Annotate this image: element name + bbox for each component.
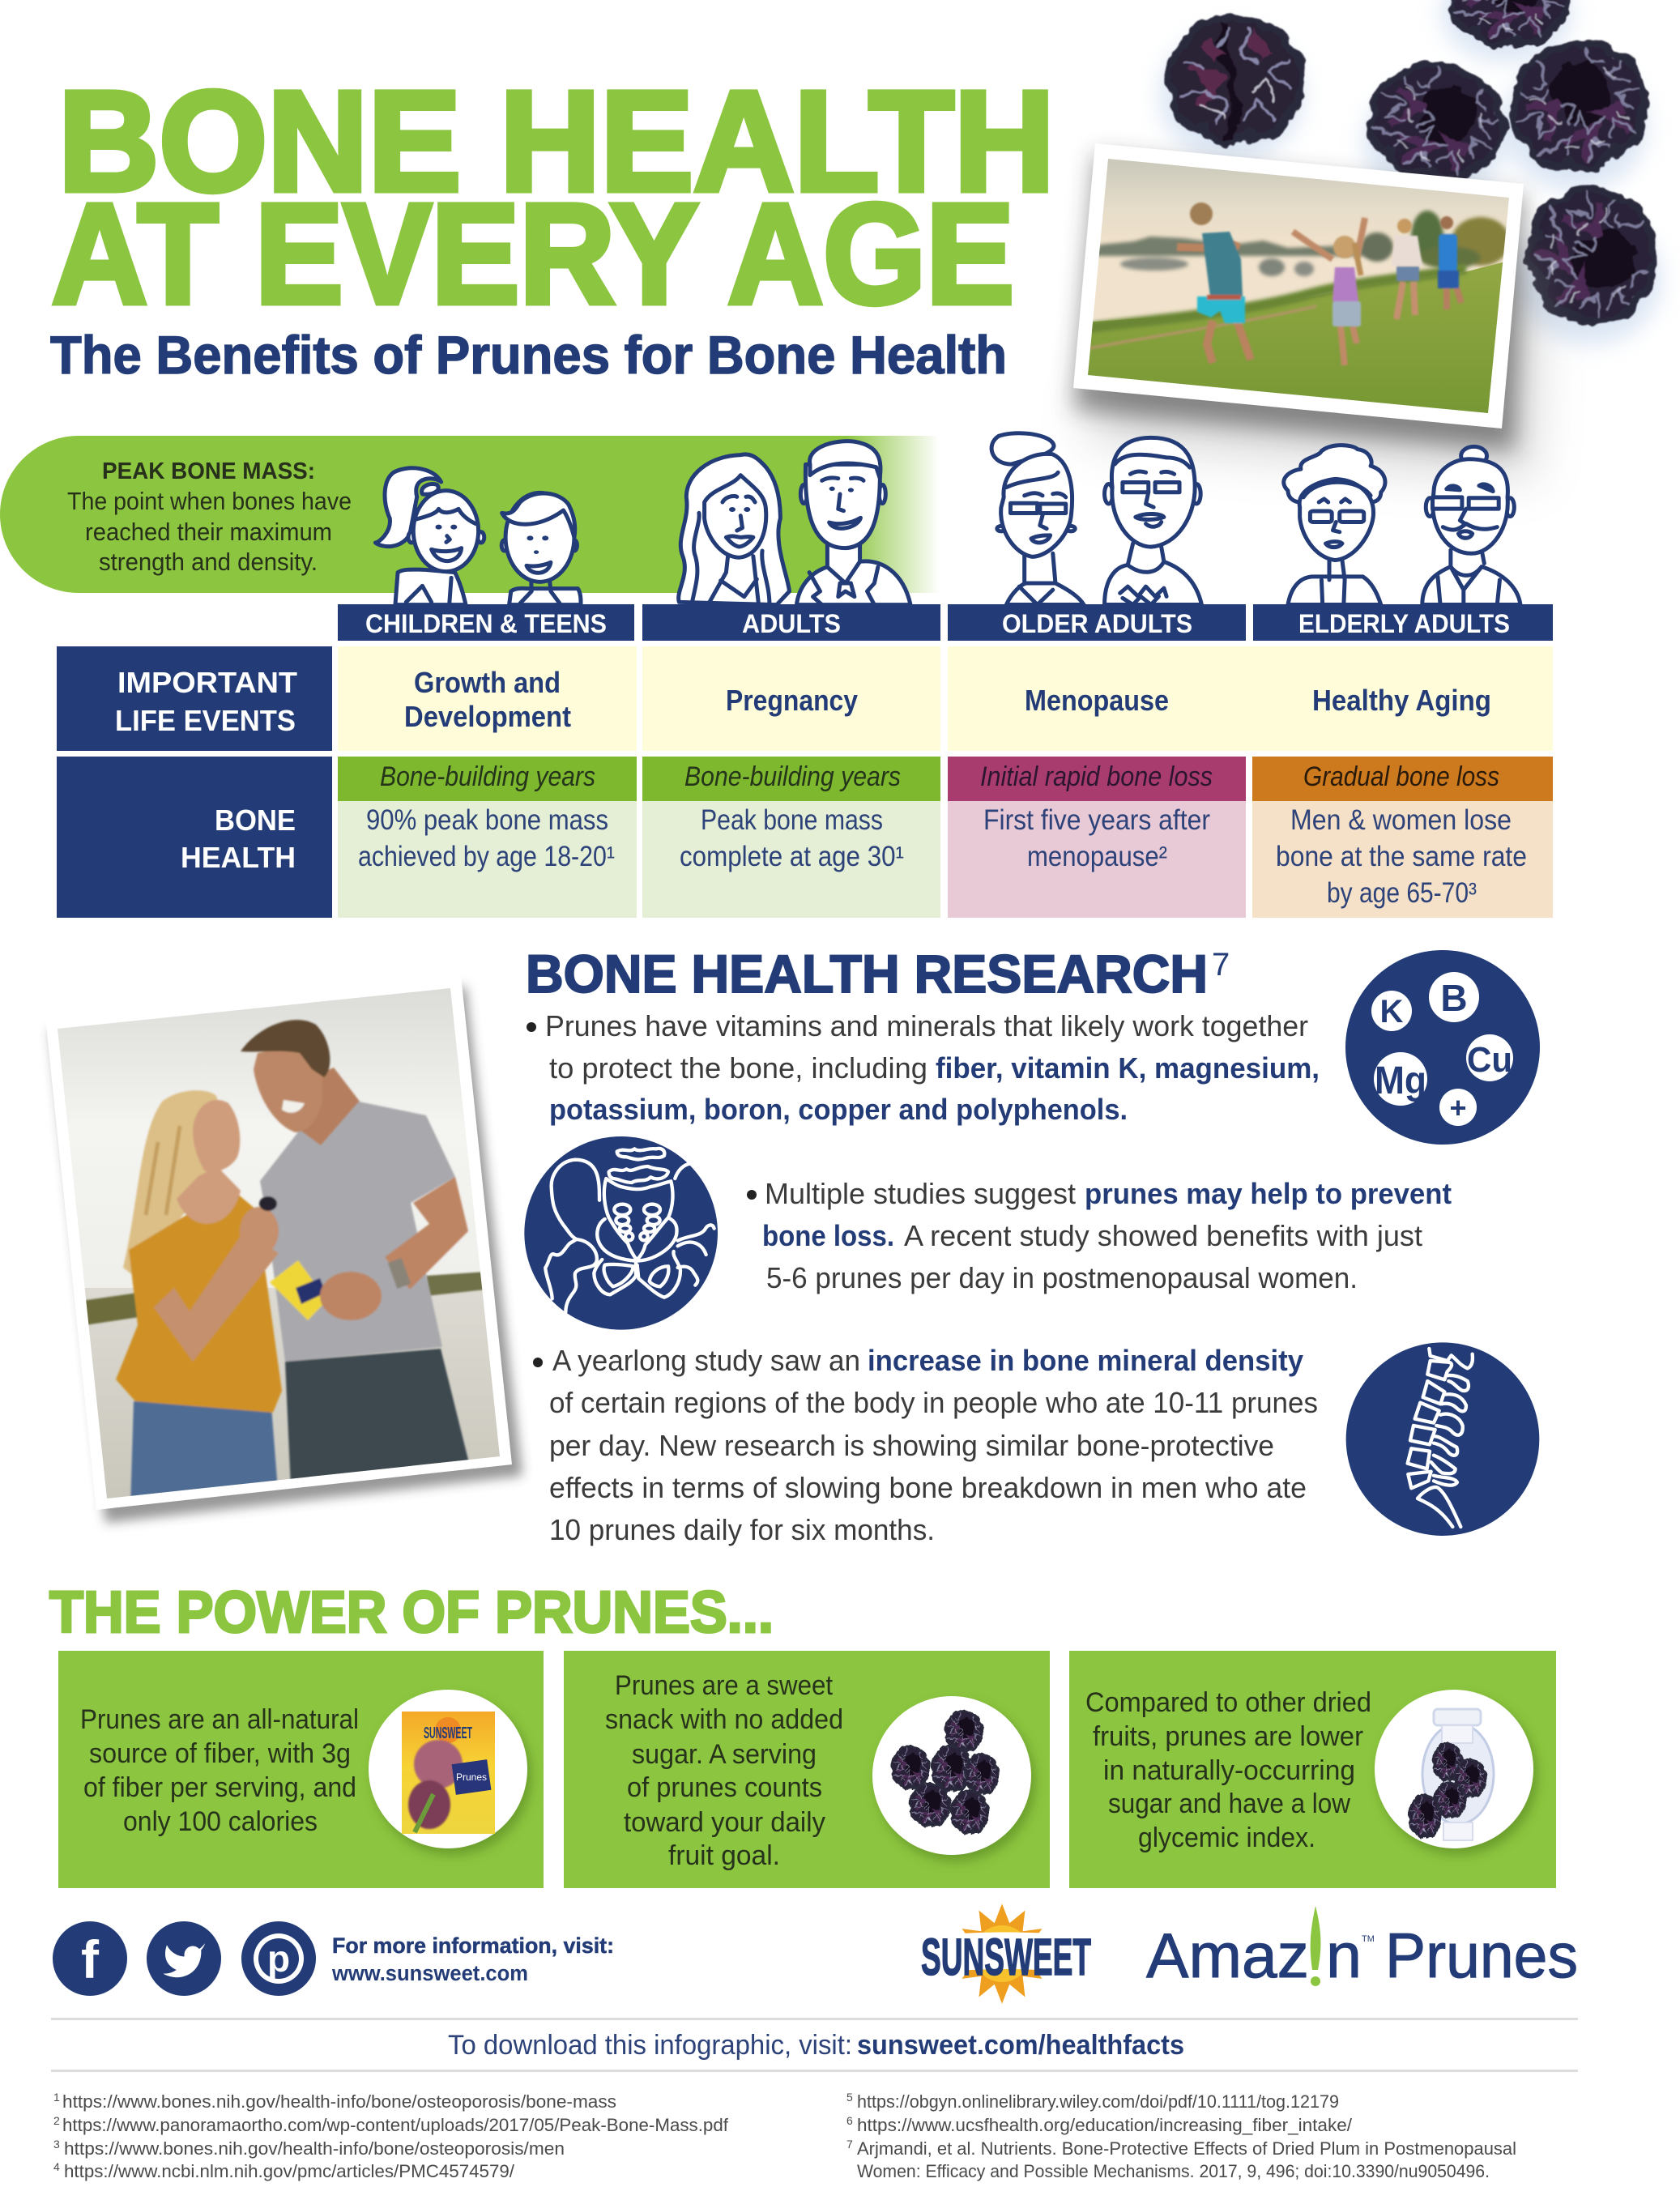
icon: prune pack: Prunes (456, 1771, 487, 1783)
column header: older adults (948, 604, 1246, 641)
bone health: elderly adults: bone at the same rate (1276, 841, 1527, 872)
text: glycemic index. (1138, 1823, 1315, 1853)
row label: important life events: LIFE EVENTS (115, 704, 296, 737)
icon: nutrients (1345, 950, 1540, 1145)
life event: growth and development: Development (404, 700, 571, 733)
woman (1396, 282, 1415, 319)
icon: facebook: f (81, 1929, 100, 1989)
bullet: vitamins and minerals: potassium, boron, copper and polyphenols. (549, 1093, 1128, 1126)
bone health: elderly adults: Gradual bone loss (1303, 761, 1499, 792)
text: Prunes are a sweet (615, 1670, 834, 1701)
text: download link (448, 2030, 1184, 2061)
subtitle: The Benefits of Prunes for Bone Health (50, 325, 1007, 385)
life event: healthy aging: Healthy Aging (1312, 684, 1491, 717)
text: peak bone mass definition: strength and density. (99, 548, 318, 576)
footnotes: left column: https://www.ncbi.nlm.nih.gov/pmc/articles/PMC4574579/ (64, 2161, 515, 2181)
bullet: prevent bone loss: A recent study showed benefits with just (904, 1219, 1422, 1252)
footnotes: right column: 5 (846, 2091, 853, 2104)
girl (1293, 218, 1365, 365)
text: of prunes counts (627, 1772, 822, 1803)
text (1085, 1687, 1371, 1853)
icon: prune pack: SUNSWEET (424, 1724, 472, 1742)
boy (501, 492, 581, 605)
logo: sunsweet (921, 1904, 1091, 2004)
icon: nutrients: B (1440, 977, 1468, 1019)
life event: growth and development: Growth and (414, 666, 561, 699)
panel: fiber (58, 1651, 544, 1888)
bone health: adults: complete at age 30¹ (680, 841, 904, 872)
text: peak bone mass definition: The point when bones have (67, 487, 352, 515)
life event: healthy aging (1252, 646, 1553, 751)
peak bone mass pill (0, 436, 940, 593)
girl (375, 468, 484, 605)
icon: twitter (147, 1921, 221, 1996)
bone health: adults (642, 757, 940, 918)
title (52, 87, 1048, 308)
footnotes: right column: Arjmandi, et al. Nutrients. Bone-Protective Effects of Dried Plum in Postmenopausal (857, 2138, 1516, 2159)
heading: bone health research: 7 (1212, 947, 1230, 983)
logo: amazin prunes: n (1326, 1920, 1362, 1991)
logo: amazin prunes: Prunes (1385, 1920, 1578, 1991)
bone health: adults: Peak bone mass (701, 804, 883, 836)
bullet: vitamins and minerals (527, 1009, 1320, 1126)
logo: sunsweet: SUNSWEET (921, 1928, 1091, 1986)
illustrations: older and elderly adults (991, 433, 1520, 605)
bullet: bone mineral density (533, 1344, 1318, 1546)
text: Prunes are an all-natural (80, 1704, 359, 1735)
column header: adults: ADULTS (742, 609, 841, 638)
bone health: older adults: Initial rapid bone loss (980, 761, 1213, 792)
bone health: elderly adults (1252, 757, 1553, 918)
elderly woman (1284, 446, 1385, 605)
text: sugar and have a low (1108, 1788, 1350, 1819)
elderly man (1422, 446, 1520, 605)
woman top (116, 1188, 282, 1413)
icon: nutrients: + (1449, 1091, 1467, 1124)
text: source of fiber, with 3g (89, 1738, 351, 1769)
icon: prune pack (402, 1712, 495, 1834)
footnotes: right column: Women: Efficacy and Possible Mechanisms. 2017, 9, 496; doi:10.3390/nu9050496. (857, 2161, 1490, 2181)
logo: amazin prunes (1146, 1906, 1578, 1991)
text: more information: www.sunsweet.com (331, 1961, 528, 1985)
man jeans (285, 1349, 474, 1507)
icon: facebook (53, 1921, 127, 1996)
footnotes: right column: 6 (846, 2114, 853, 2127)
bone health: children and teens (338, 757, 637, 918)
panel: low glycemic (1069, 1651, 1556, 1888)
heading: bone health research: BONE HEALTH RESEARCH (526, 944, 1208, 1004)
footnotes: right column: https://www.ucsfhealth.org/education/increasing_fiber_intake/ (857, 2115, 1353, 2135)
age table (57, 604, 1553, 918)
bullet: vitamins and minerals: Prunes have vitamins and minerals that likely work together (545, 1009, 1308, 1042)
row label: bone health (57, 757, 332, 918)
footnotes: left column: https://www.bones.nih.gov/health-info/bone/osteoporosis/bone-mass (62, 2091, 616, 2112)
icon: nutrients: Mg (1375, 1059, 1426, 1102)
bullet: bone mineral density: 10 prunes daily for six months. (549, 1513, 935, 1546)
bone health: older adults (948, 757, 1246, 918)
row label: important life events: IMPORTANT (117, 666, 297, 699)
text: fruits, prunes are lower (1093, 1721, 1363, 1752)
older man (1105, 437, 1201, 605)
bullet: prevent bone loss: Multiple studies suggest (765, 1177, 1076, 1210)
photo: couple with prunes (45, 975, 522, 1523)
bullet: prevent bone loss: prunes may help to prevent (1085, 1177, 1452, 1210)
text: sugar. A serving (632, 1739, 817, 1770)
older woman (991, 433, 1084, 605)
title: BONE HEALTH (58, 62, 1055, 221)
bone health: elderly adults: Men & women lose (1290, 804, 1512, 836)
icon: prune jar (1408, 1709, 1494, 1840)
icon: pinterest (241, 1921, 316, 1996)
man neck (298, 1068, 363, 1147)
neck opening (177, 1166, 241, 1224)
text: fruit goal. (668, 1840, 780, 1871)
bullet: prevent bone loss (747, 1177, 1452, 1294)
bone health: children and teens: achieved by age 18-20¹ (358, 841, 615, 872)
man head (254, 1045, 322, 1132)
title: AT EVERY AGE (52, 175, 1014, 334)
footnotes: left column: https://www.bones.nih.gov/health-info/bone/osteoporosis/men (64, 2138, 565, 2159)
bullet: bone mineral density: per day. New research is showing similar bone-protective (549, 1429, 1274, 1462)
bullet: bone mineral density: increase in bone mineral density (868, 1344, 1303, 1377)
woman arm (154, 1231, 279, 1362)
footnotes: left column: https://www.panoramaortho.com/wp-content/uploads/2017/05/Peak-Bone-Mass.pdf (62, 2115, 729, 2135)
bullet: bone mineral density: of certain regions of the body in people who ate 10-11 prunes (549, 1386, 1318, 1419)
footnotes: right column: 7 (846, 2138, 853, 2151)
bone health: older adults: First five years after (983, 804, 1210, 836)
icon: pelvis (524, 1136, 718, 1330)
column header: older adults: OLDER ADULTS (1002, 609, 1192, 638)
prunes photo cluster (1159, 0, 1678, 344)
bullet: bone mineral density: A yearlong study saw an (552, 1344, 860, 1377)
man arm (385, 1177, 468, 1290)
bone health: older adults: menopause² (1027, 841, 1167, 872)
row label: important life events (57, 646, 332, 751)
text: more information: For more information, visit: (332, 1933, 614, 1958)
life event: pregnancy: Pregnancy (726, 684, 858, 717)
text: download link: sunsweet.com/healthfacts (857, 2030, 1184, 2061)
text: only 100 calories (123, 1806, 318, 1837)
pack (270, 1260, 327, 1320)
heading: the power of prunes: THE POWER OF PRUNES... (49, 1580, 774, 1645)
bone health: adults: Bone-building years (684, 761, 901, 792)
footnotes: left column (53, 2091, 729, 2181)
panel: no added sugar (564, 1651, 1050, 1888)
footnotes: left column: 1 (53, 2091, 60, 2104)
column header: children and teens: CHILDREN & TEENS (365, 609, 607, 638)
row label: bone health: HEALTH (181, 841, 296, 874)
man shirt (260, 1102, 455, 1362)
text (80, 1704, 359, 1837)
text: in naturally-occurring (1103, 1755, 1355, 1786)
bone health: children and teens: Bone-building years (380, 761, 595, 792)
man (1447, 288, 1461, 309)
column header: adults (642, 604, 940, 641)
text: of fiber per serving, and (83, 1772, 356, 1803)
bone health: elderly adults: by age 65-70³ (1327, 877, 1477, 909)
bullet: prevent bone loss: bone loss. (762, 1219, 894, 1252)
footnotes: right column: https://obgyn.onlinelibrary.wiley.com/doi/pdf/10.1111/tog.12179 (857, 2091, 1339, 2112)
text: download link: To download this infographic, visit: (448, 2030, 852, 2061)
text (605, 1670, 843, 1871)
adult man (796, 441, 910, 605)
life event: growth and development (338, 646, 637, 751)
life event: menopause: Menopause (1025, 684, 1169, 717)
icon: prunes (891, 1710, 1000, 1835)
woman hair (123, 1090, 217, 1276)
woman jeans (130, 1401, 279, 1507)
icon: nutrients: K (1380, 994, 1404, 1030)
text: peak bone mass definition (67, 458, 352, 576)
icon: nutrients: Cu (1467, 1040, 1512, 1080)
text: more information (331, 1933, 614, 1985)
text: toward your daily (624, 1807, 825, 1838)
row label: bone health: BONE (215, 804, 296, 837)
life event: pregnancy (642, 646, 940, 751)
boy (1177, 240, 1251, 363)
bone health: children and teens: 90% peak bone mass (366, 804, 608, 836)
text: peak bone mass definition: PEAK BONE MASS: (102, 458, 315, 484)
logo: amazin prunes: TM (1362, 1934, 1375, 1944)
illustrations: children and adults (375, 441, 910, 605)
footnotes: left column: 2 (53, 2114, 60, 2127)
bullet: prevent bone loss: 5-6 prunes per day in postmenopausal women. (766, 1261, 1358, 1294)
footnotes: left column: 4 (53, 2160, 60, 2173)
text: peak bone mass definition: reached their maximum (85, 518, 332, 546)
column header: elderly adults: ELDERLY ADULTS (1298, 609, 1510, 638)
photo: family running by the lake (1073, 143, 1539, 478)
bullet: bone mineral density: effects in terms of slowing bone breakdown in men who ate (549, 1471, 1307, 1504)
icon: pinterest: p (267, 1938, 290, 1980)
adult woman (679, 454, 790, 605)
text: Compared to other dried (1085, 1687, 1371, 1718)
icon: spine (1346, 1342, 1539, 1536)
column header: elderly adults (1253, 604, 1553, 641)
footnotes: left column: 3 (53, 2138, 60, 2151)
column header: children and teens (338, 604, 634, 641)
text: snack with no added (605, 1704, 843, 1735)
life event: menopause (948, 646, 1254, 751)
bullet: vitamins and minerals: to protect the bone, including (549, 1051, 927, 1085)
logo: amazin prunes: Amaz (1146, 1920, 1309, 1991)
bullet: vitamins and minerals: fiber, vitamin K, magnesium, (936, 1051, 1320, 1085)
footnotes: right column (846, 2091, 1516, 2181)
